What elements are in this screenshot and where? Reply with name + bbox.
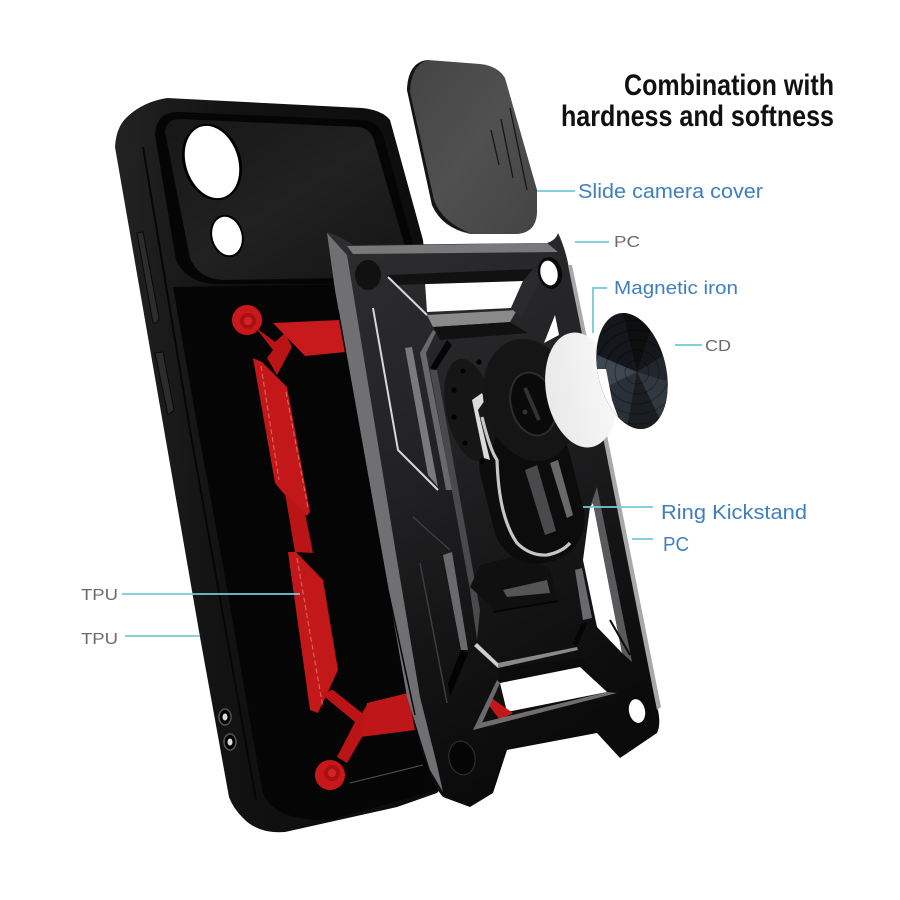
radial brushed wedges (596, 354, 637, 390)
slide camera cover (407, 60, 537, 234)
top window bevel (427, 310, 517, 327)
callout line: ring kickstand (583, 506, 653, 508)
callout line: slide camera cover (537, 190, 575, 192)
metal ring (482, 417, 570, 555)
callout line: CD (675, 344, 702, 346)
case inner back panel (173, 283, 500, 820)
concentric grooves (596, 320, 668, 424)
side plate stitching (261, 366, 308, 508)
frame body (327, 232, 659, 807)
label: ring kickstand: Ring Kickstand (661, 502, 807, 524)
label: TPU outer: TPU (81, 631, 118, 648)
dark band above bottom window (498, 658, 607, 692)
right inner strip (590, 487, 632, 662)
lower brace (610, 620, 630, 655)
callout line: PC lower (632, 538, 653, 540)
callout line: TPU inner (122, 593, 300, 595)
top mount disc (232, 305, 262, 335)
case bottom seam (350, 765, 423, 783)
label: magnetic iron: Magnetic iron (614, 278, 738, 298)
CD metal disc (596, 313, 668, 429)
hinge glint (472, 393, 490, 460)
black accent (430, 340, 452, 370)
top plate (273, 320, 345, 356)
label: CD: CD (705, 338, 731, 355)
recess ribs (525, 465, 556, 535)
speaker holes (219, 709, 236, 750)
screw hole top left (355, 260, 381, 290)
lower left panel line (413, 517, 450, 703)
callout line: magnetic iron (593, 288, 607, 333)
cover dark edge (407, 60, 470, 233)
ring kickstand (436, 328, 594, 573)
right top window (544, 315, 559, 343)
kickstand recess (470, 411, 594, 573)
connector (285, 493, 313, 553)
side plate lower (288, 552, 338, 713)
bottom mount disc (315, 760, 345, 790)
right outer edge (568, 265, 661, 710)
label: PC top: PC (614, 234, 640, 251)
top arm (256, 328, 292, 375)
label: slide camera cover: Slide camera cover (578, 181, 763, 203)
top plate tip (370, 322, 397, 352)
inner grey strip (405, 347, 438, 487)
white edge lines (373, 277, 438, 490)
back case (115, 98, 520, 832)
right black facet (573, 622, 588, 647)
long inner strip (430, 370, 480, 640)
lower plate (360, 693, 415, 737)
callout line: PC top (575, 241, 609, 243)
right slim window (583, 503, 622, 653)
lower left grey strip (443, 552, 468, 650)
title: Combination with (624, 69, 834, 102)
screw hole bottom right (623, 694, 653, 730)
black facet (448, 650, 468, 697)
screw hole bottom left (446, 739, 478, 777)
bottom window (500, 667, 607, 712)
magnetic iron disc (536, 327, 626, 453)
callout line: TPU outer (125, 635, 200, 637)
cover groove lines (491, 108, 527, 190)
lens hole small (205, 211, 249, 261)
title: hardness and softness (561, 100, 834, 133)
bevel above bottom window (498, 647, 578, 668)
screw hole top right (535, 255, 565, 291)
left rail strip (327, 233, 443, 792)
left rail shadow line (338, 310, 415, 715)
case outer shell (115, 98, 520, 832)
right middle strip (575, 568, 592, 620)
notch (597, 369, 618, 418)
disc slot (525, 388, 539, 420)
side button upper (137, 232, 159, 323)
side button lower (155, 352, 174, 415)
red TPU skeleton (232, 297, 438, 790)
hinge plate with dots (436, 354, 504, 466)
lower arm (320, 690, 372, 763)
top window (425, 281, 523, 312)
title (561, 69, 834, 133)
top band (347, 243, 558, 254)
top window shade (387, 269, 533, 285)
lens hole large (172, 116, 252, 208)
label: TPU inner: TPU (81, 587, 118, 604)
rim seam (143, 147, 256, 800)
side plate upper (253, 358, 310, 516)
hard PC frame (327, 232, 661, 807)
label: PC lower: PC (663, 534, 689, 556)
red strip through window (487, 697, 513, 720)
nub (422, 297, 438, 313)
lower plate stitching (297, 558, 323, 708)
kickstand base (470, 555, 558, 612)
ring support disc (470, 328, 590, 472)
bottom window bevel (473, 692, 617, 730)
diagonal brace (511, 270, 548, 317)
camera island (155, 112, 420, 284)
